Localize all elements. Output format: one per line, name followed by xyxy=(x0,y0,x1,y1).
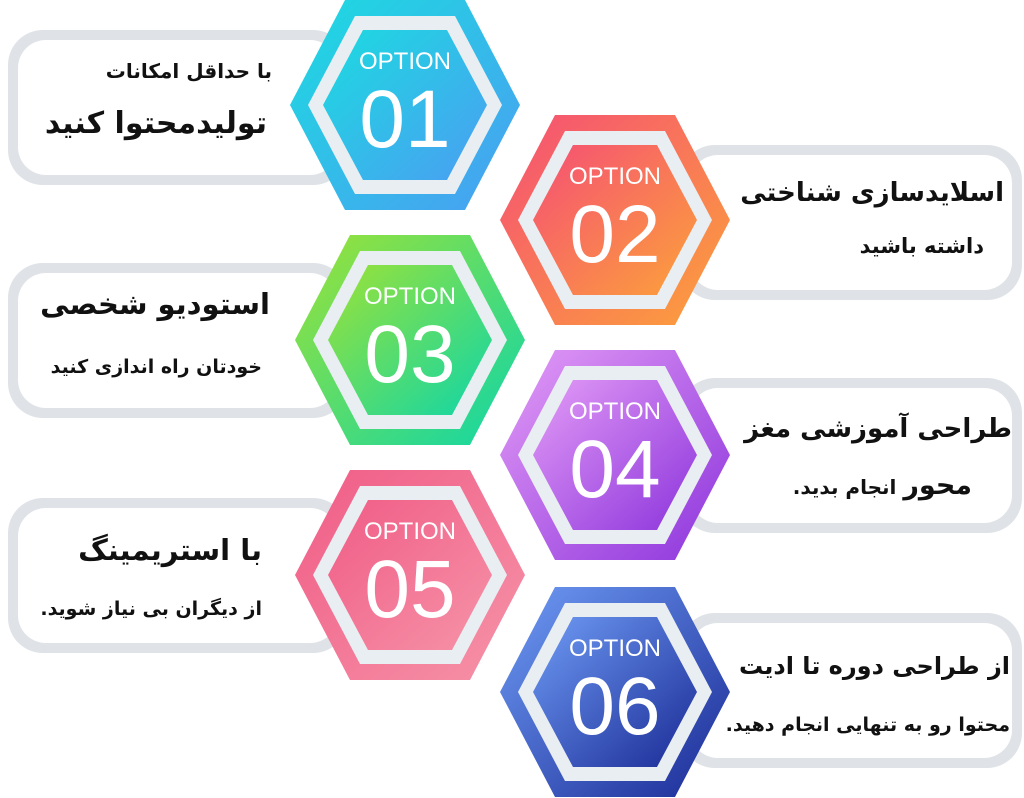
hexagon 04: 04 xyxy=(569,424,661,515)
text 1: با حداقل امکانات xyxy=(106,59,272,83)
banner 6 xyxy=(680,613,1022,768)
hexagon 03: OPTION xyxy=(364,283,456,310)
hexagon 05: 05 xyxy=(364,544,456,635)
text 6: از طراحی دوره تا ادیت xyxy=(739,652,1010,680)
hexagon 02: OPTION xyxy=(569,163,661,190)
text 5b: از دیگران بی نیاز شوید. xyxy=(40,598,262,620)
text 6b: محتوا رو به تنهایی انجام دهید. xyxy=(726,714,1010,736)
text 3b: خودتان راه اندازی کنید xyxy=(51,356,262,378)
hexagon 01 xyxy=(290,0,520,210)
hexagon 05: OPTION xyxy=(364,518,456,545)
hexagon 01: 01 xyxy=(359,74,451,165)
hexagon 06: 06 xyxy=(569,661,661,752)
text 3: استودیو شخصی xyxy=(40,287,270,321)
banner 5 xyxy=(8,498,348,653)
hexagon 04: OPTION xyxy=(569,398,661,425)
text 1b: تولیدمحتوا کنید xyxy=(45,106,267,141)
text 2: اسلایدسازی شناختی xyxy=(740,178,1004,208)
text 2b: داشته باشید xyxy=(860,234,984,258)
banner 4 xyxy=(680,378,1022,533)
text 5: با استریمینگ xyxy=(78,533,262,567)
hexagon 03 xyxy=(295,235,525,445)
banner 1 xyxy=(8,30,348,185)
hexagon 03: 03 xyxy=(364,309,456,400)
hexagon 01: OPTION xyxy=(359,48,451,75)
hexagon 02: 02 xyxy=(569,189,661,280)
banner 2 xyxy=(680,145,1022,300)
hexagon 06: OPTION xyxy=(569,635,661,662)
hexagon 02 xyxy=(500,115,730,325)
banner 3 xyxy=(8,263,348,418)
hexagon 05 xyxy=(295,470,525,680)
text 4: طراحی آموزشی مغز xyxy=(744,414,1012,444)
hexagon 06 xyxy=(500,587,730,797)
hexagon 04 xyxy=(500,350,730,560)
text 4b: محور انجام بدید. xyxy=(793,470,972,501)
